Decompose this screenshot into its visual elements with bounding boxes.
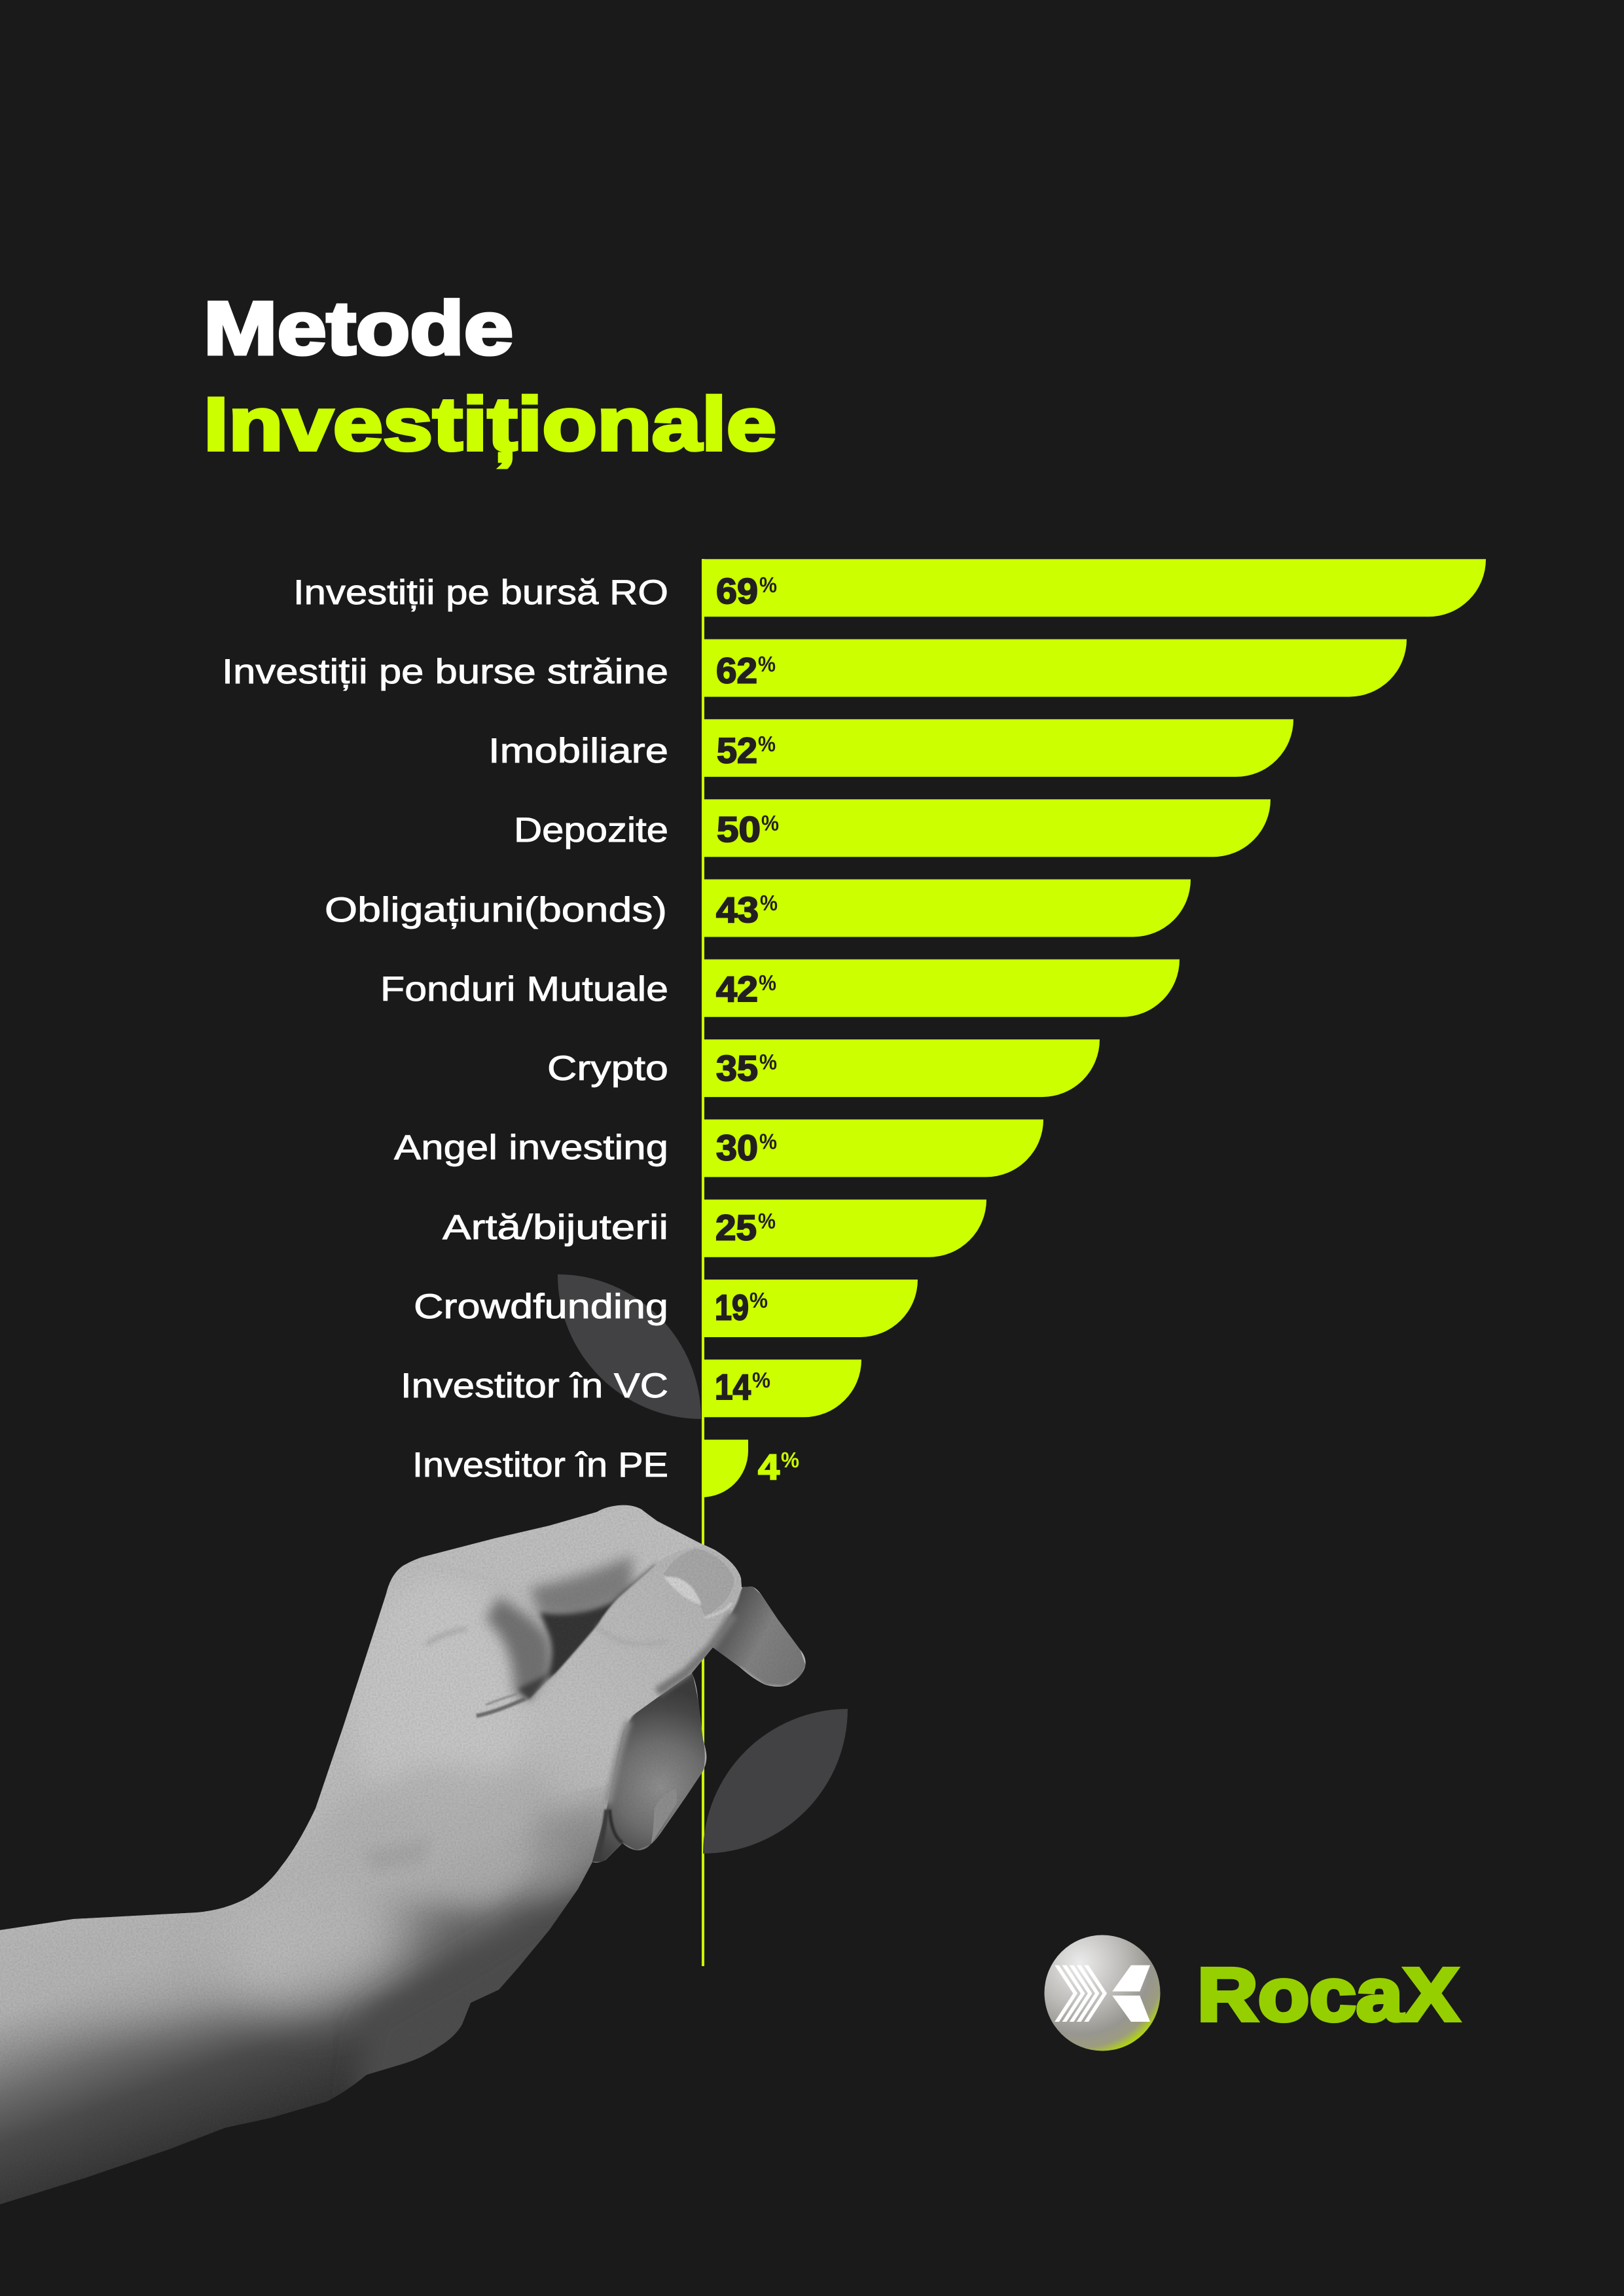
bar 62%: 62 <box>716 651 757 691</box>
label: Investitor în PE: Investitor în PE <box>412 1446 668 1484</box>
bar 30% <box>702 1119 1043 1177</box>
bar 14% <box>702 1359 861 1417</box>
bar 52%: % <box>758 732 776 756</box>
bar 35% <box>702 1039 1100 1097</box>
bar chart <box>702 559 1486 1498</box>
bar 25% <box>702 1200 986 1257</box>
bar 42%: % <box>759 971 776 995</box>
bar 43%: % <box>760 891 778 915</box>
bar 35%: 35 <box>716 1048 758 1088</box>
decorative leaf: right of stem <box>703 1709 848 1854</box>
title: Metode <box>204 287 513 370</box>
bar 43%: 43 <box>716 889 759 930</box>
bar 35%: % <box>759 1050 777 1074</box>
bar 69%: % <box>759 573 777 597</box>
bar 30%: % <box>759 1130 777 1153</box>
bar 25%: 25 <box>715 1207 757 1247</box>
label: Crypto: Crypto <box>547 1049 668 1088</box>
folded index knuckle <box>486 1597 552 1702</box>
hand holding stem <box>0 1492 825 2219</box>
label: Obligațiuni(bonds): Obligațiuni(bonds) <box>325 891 667 929</box>
bar 25%: % <box>758 1209 776 1233</box>
index finger underside shading <box>530 1556 632 1619</box>
title <box>204 287 776 467</box>
bar 14%: % <box>752 1368 770 1392</box>
finger curl shadow <box>540 1564 657 1679</box>
bar 50%: 50 <box>717 809 761 850</box>
logo <box>1045 1935 1459 2051</box>
label: Investiții pe burse străine: Investiții pe burse străine <box>222 653 668 691</box>
thumb nail <box>664 1549 734 1617</box>
category labels <box>222 573 668 1484</box>
bar 19%: % <box>749 1288 768 1312</box>
title: Investiționale <box>204 382 776 467</box>
label: Depozite: Depozite <box>514 811 668 850</box>
palm creases <box>477 1698 526 1716</box>
middle finger <box>713 1587 805 1687</box>
bar 14%: 14 <box>715 1367 751 1407</box>
label: Artă/bijuterii: Artă/bijuterii <box>442 1208 668 1247</box>
bar 4%: 4 <box>758 1446 780 1487</box>
decorative leaf: left of stem <box>558 1274 701 1419</box>
infographic canvas <box>0 298 1486 2204</box>
bar 4% <box>702 1440 799 1498</box>
label: Fonduri Mutuale: Fonduri Mutuale <box>380 970 668 1009</box>
bar 50%: % <box>761 811 779 835</box>
bar 52%: 52 <box>717 730 757 770</box>
bar 52% <box>702 719 1293 777</box>
label: Crowdfunding: Crowdfunding <box>414 1287 668 1326</box>
logo wordmark: RocaX <box>1197 1953 1459 2037</box>
bar 4%: % <box>781 1448 799 1472</box>
bar 42% <box>702 960 1180 1017</box>
bar 43% <box>702 880 1191 937</box>
bar 30%: 30 <box>716 1127 758 1168</box>
thumb <box>525 1549 742 1784</box>
label: Angel investing: Angel investing <box>394 1128 668 1167</box>
ring and little fingers <box>592 1673 705 1862</box>
logo mark <box>1045 1935 1160 2051</box>
label: Investitor în VC: Investitor în VC <box>401 1367 668 1405</box>
bar 42%: 42 <box>716 969 758 1009</box>
bar 50% <box>702 799 1271 857</box>
chart axis stem <box>702 559 704 1966</box>
bar 62% <box>702 639 1407 697</box>
bar 19%: 19 <box>715 1287 749 1327</box>
label: Investiții pe bursă RO: Investiții pe bursă RO <box>293 573 668 612</box>
bar 69%: 69 <box>716 571 758 611</box>
bar 69% <box>702 559 1486 617</box>
label: Imobiliare: Imobiliare <box>488 732 668 770</box>
bar 62%: % <box>758 652 776 676</box>
bar 19% <box>702 1280 918 1337</box>
